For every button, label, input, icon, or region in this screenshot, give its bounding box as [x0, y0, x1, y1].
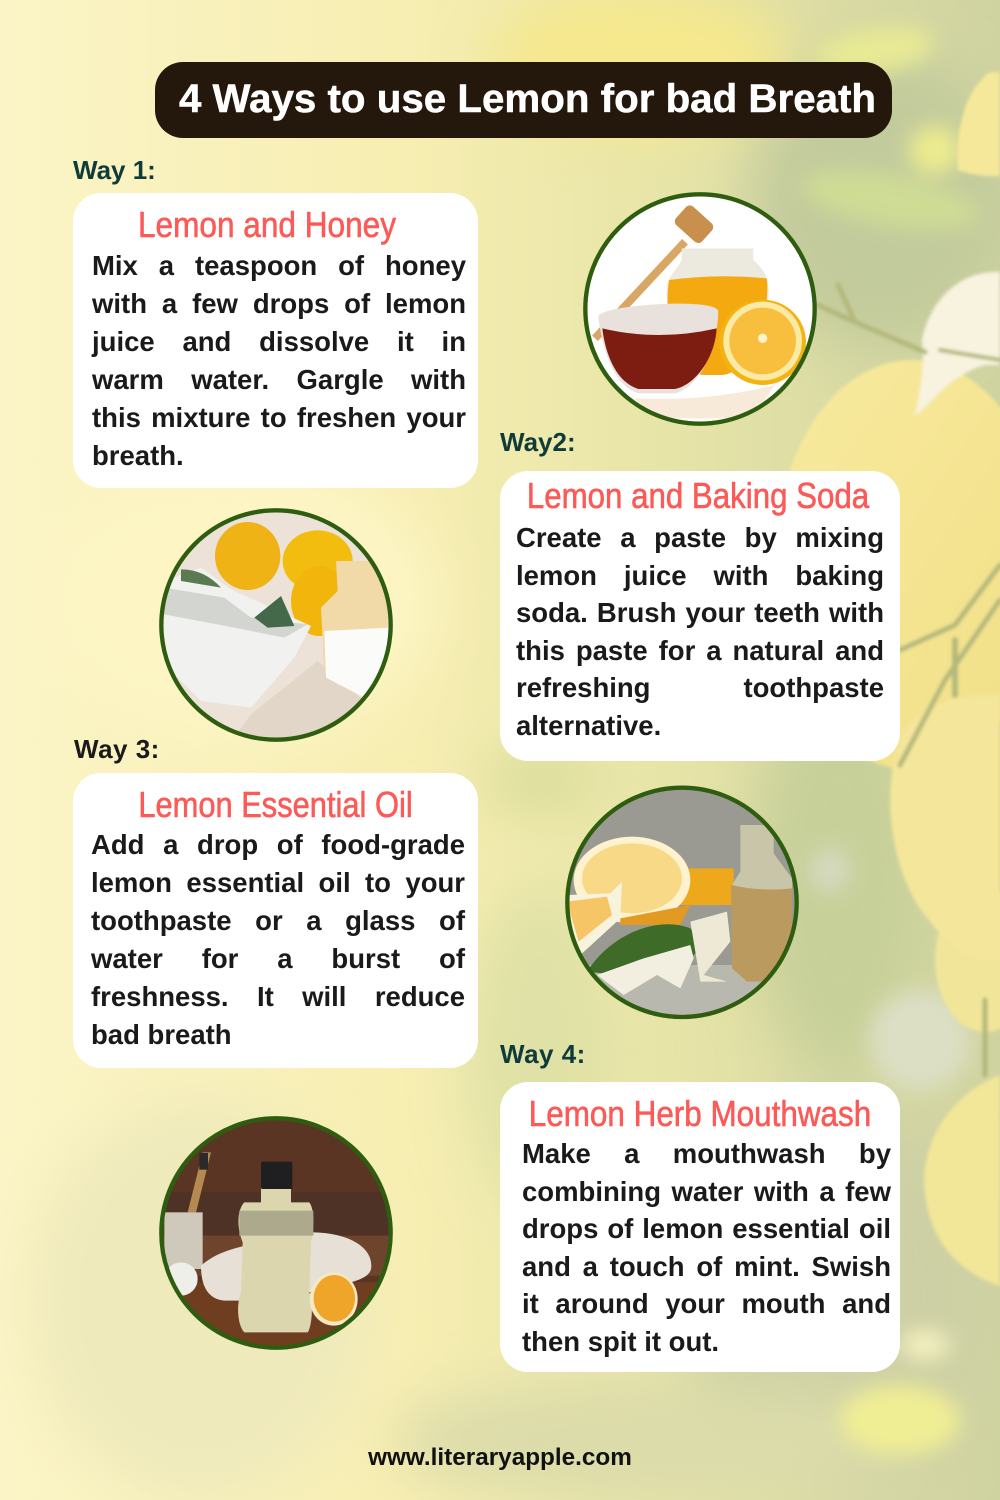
text: way 4: combining water with a few [522, 1176, 891, 1207]
image: honey and lemon tea [583, 192, 817, 426]
text: way 4: then spit it out. [522, 1326, 719, 1357]
text: way 2: Create a paste by mixing [516, 522, 884, 553]
text: way 2: alternative. [516, 710, 661, 741]
text: way 3: bad breath [91, 1019, 232, 1050]
text: way 2: soda. Brush your teeth with [516, 597, 884, 628]
text: way 4: and a touch of mint. Swish [522, 1251, 891, 1282]
text: way 4 [522, 1138, 891, 1357]
footer: website: www.literaryapple.com [368, 1444, 632, 1471]
panel: way 4 lemon herb mouthwash [500, 1082, 900, 1372]
text: way 1: breath. [92, 440, 184, 471]
image: lemon and essential oil [565, 786, 799, 1020]
label: way 2: Way2: [500, 427, 576, 457]
text: way 2: refreshing toothpaste [516, 672, 884, 703]
text: way 1: Mix a teaspoon of honey [92, 250, 466, 281]
text: way 2: lemon juice with baking [516, 560, 884, 591]
text: way 3: water for a burst of [91, 943, 465, 974]
text: way 1: with a few drops of lemon [92, 288, 466, 319]
image: mouthwash bottle [159, 1116, 393, 1350]
panel: way 3 lemon essential oil [73, 773, 478, 1068]
text: way 2 [516, 522, 884, 741]
label: way 1: Way 1: [73, 155, 156, 185]
heading: lemon and baking soda: Lemon and Baking Soda [527, 475, 869, 516]
text: way 1: this mixture to freshen your [92, 402, 466, 433]
text: way 4: Make a mouthwash by [522, 1138, 891, 1169]
title banner [155, 62, 892, 138]
text: way 1 [92, 250, 466, 471]
label: way 4: Way 4: [500, 1039, 586, 1069]
text: way 3: lemon essential oil to your [91, 867, 465, 898]
heading: lemon herb mouthwash: Lemon Herb Mouthwash [529, 1093, 871, 1134]
text: way 1: warm water. Gargle with [92, 364, 466, 395]
text: way 3: freshness. It will reduce [91, 981, 465, 1012]
heading: lemon and honey: Lemon and Honey [138, 204, 396, 245]
text: way 4: drops of lemon essential oil [522, 1213, 891, 1244]
text: way 3: Add a drop of food-grade [91, 829, 465, 860]
text: way 2: this paste for a natural and [516, 635, 884, 666]
text: way 1: juice and dissolve it in [92, 326, 466, 357]
title banner: 4 Ways to use Lemon for bad Breath [179, 76, 876, 121]
panel: way 1 lemon and honey [73, 193, 478, 488]
text: way 3 [90, 829, 466, 1050]
label: way 3: Way 3: [74, 734, 160, 764]
image: lemons and baking soda [159, 508, 393, 742]
panel: way 2 lemon and baking soda [500, 471, 900, 761]
text: way 3: toothpaste or a glass of [91, 905, 465, 936]
text: way 4: it around your mouth and [522, 1288, 891, 1319]
heading: lemon essential oil: Lemon Essential Oil [138, 784, 413, 825]
